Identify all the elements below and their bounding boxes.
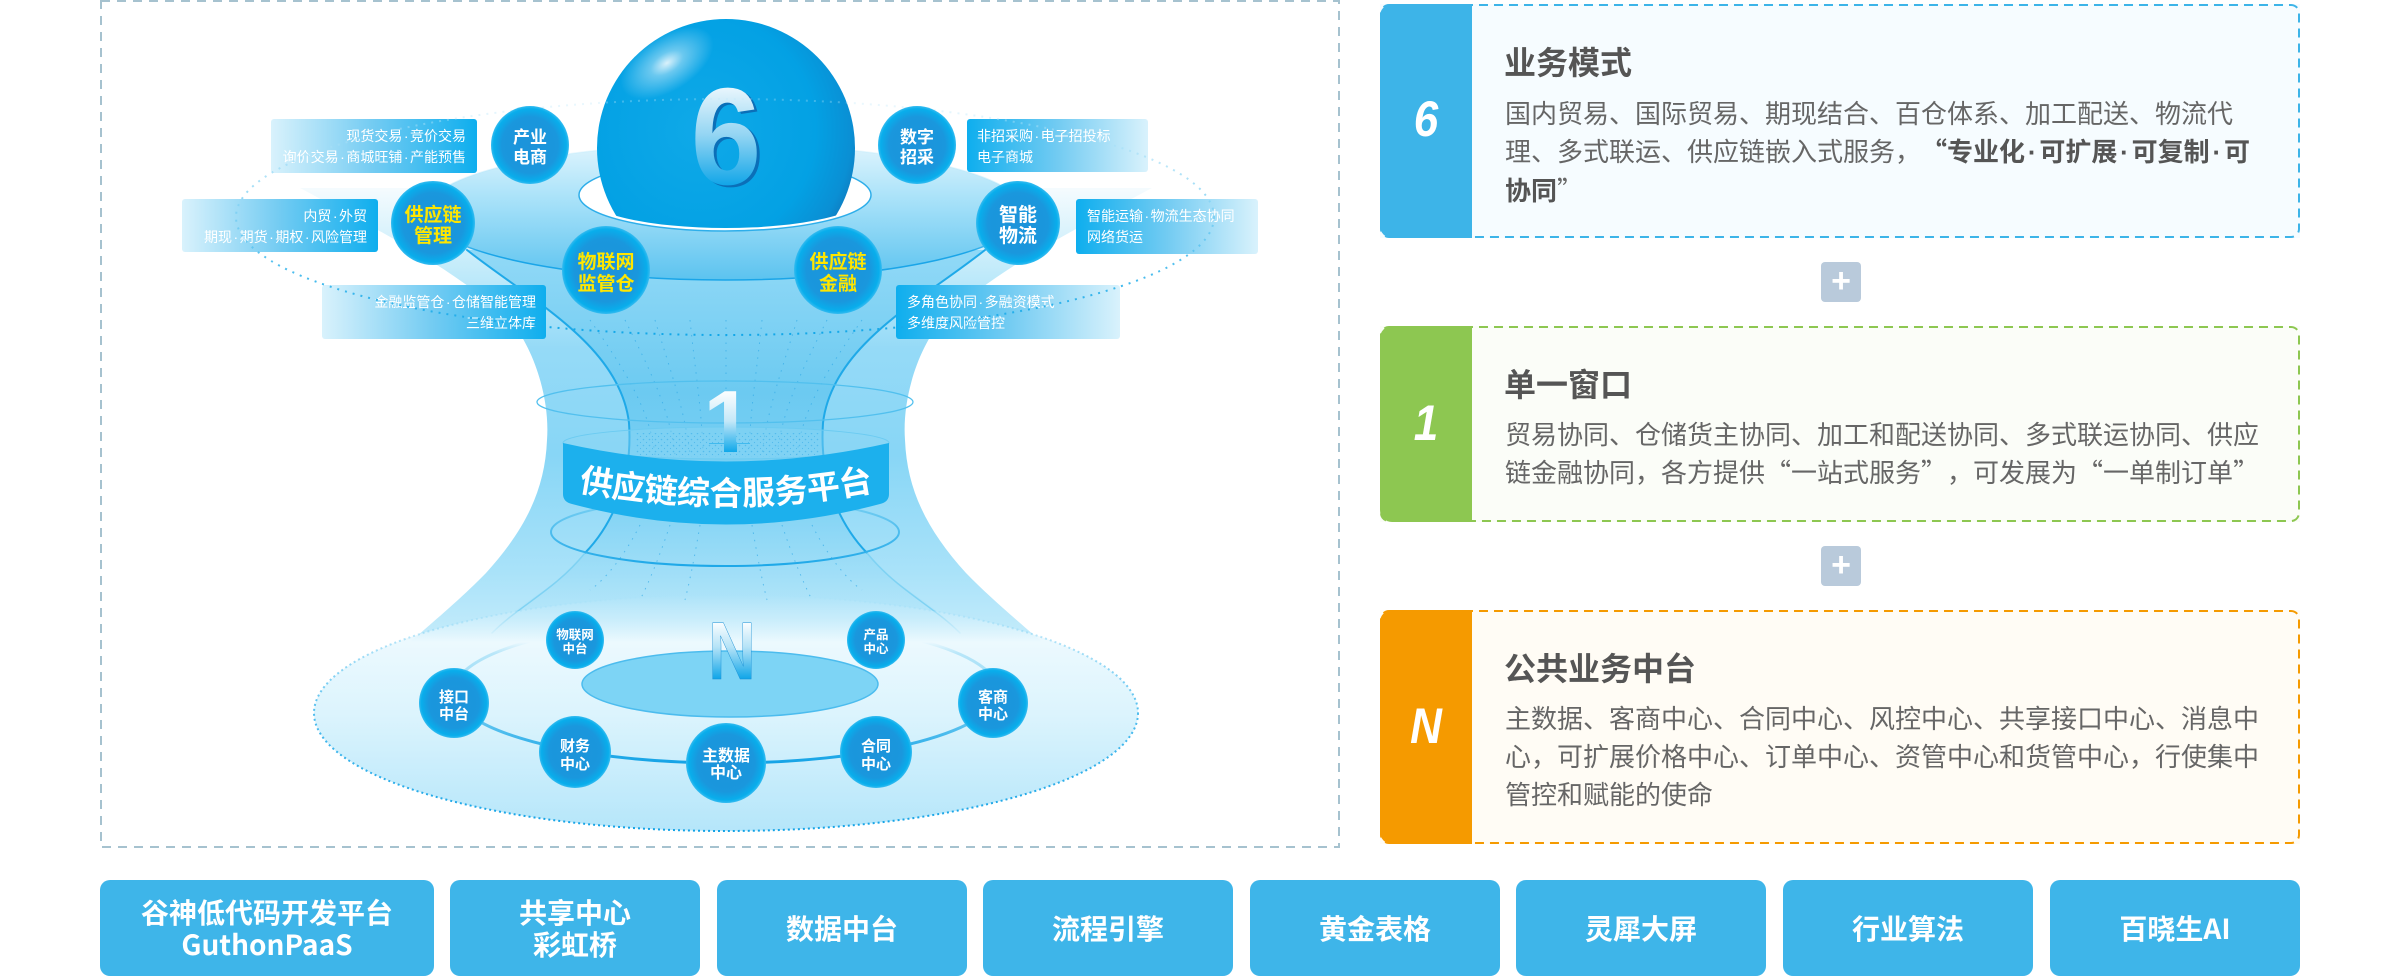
body: · [2120,137,2129,167]
center: 主数据中心 [686,723,766,803]
numeral 6: 6 [691,60,761,214]
body: · [2028,137,2037,167]
center: 物联网中台 [546,611,604,669]
sphere [597,19,855,228]
center: 接口中台: 接口 [439,686,469,707]
label: 产业电商 detail: 询价交易·商城旺铺·产能预售 [283,149,466,165]
card: 单一窗口 [1380,326,2300,522]
number 1: 1 [1414,395,1438,451]
label: 供应链管理 detail: 期现·期货·期权·风险管理 [204,229,367,245]
panel border [101,1,1339,847]
center: 物联网中台: 中台 [562,638,588,657]
body: 理、多式联运、供应链嵌入式服务， 专业化 可扩展 可复制 可 [1505,132,2250,169]
numeral 1: 1 [704,372,752,471]
numeral 6 shadow: 6 [694,62,764,216]
center: 客商中心: 客商 [978,686,1008,707]
body: “ [1765,453,1791,490]
plus: + [1831,546,1851,584]
button: 灵犀大屏: 灵犀大屏 [1585,908,1697,948]
button: 黄金表格 [1250,880,1500,976]
button: 黄金表格: 黄金表格 [1319,908,1431,948]
badge 6 [1380,4,1472,238]
ring connecting centers [454,619,998,763]
body: “ [1921,132,1947,169]
label: 智能物流 detail [1076,199,1258,254]
body [1505,699,2259,812]
plus [1821,546,1861,586]
body: 管控和赋能的使命 [1505,775,1713,812]
body: 协同 [1505,171,1557,208]
plus [1821,262,1861,302]
circle: 智能物流: 智能 [999,200,1037,227]
number N: N [1410,698,1442,754]
number 6: 6 [1414,91,1438,147]
circle: 物联网监管仓: 监管仓 [577,269,635,296]
center: 物联网中台: 物联网 [556,624,594,643]
circle: 供应链管理 [391,181,475,265]
center: 财务中心: 中心 [560,753,590,774]
button: 谷神低代码开发平台: GuthonPaaS [181,924,353,964]
top disc [425,144,1025,280]
label: 数字招采 detail: 电子商城 [977,149,1033,165]
button: 共享中心彩虹桥: 彩虹桥 [533,924,617,964]
heading: 单一窗口 [1504,360,1632,406]
center: 客商中心: 中心 [978,703,1008,724]
circle: 数字招采 [878,106,956,184]
circle: 产业电商: 电商 [513,143,547,168]
badge N [1380,610,1472,844]
central ellipse [582,651,878,717]
circle: 数字招采: 数字 [900,123,934,148]
waist upper ring [537,381,913,423]
center: 客商中心 [958,668,1028,738]
button: 谷神低代码开发平台: 谷神低代码开发平台 [141,892,393,932]
label: 物联网监管仓 detail: 金融监管仓·仓储智能管理 [374,294,536,310]
funnel inner tube [467,250,985,633]
circle: 数字招采: 招采 [900,143,934,168]
circle: 供应链金融: 供应链 [809,247,867,274]
body: ” [2233,453,2259,490]
body: 国内贸易、国际贸易、期现结合、百仓体系、加工配送、物流代 [1505,94,2233,131]
button: 行业算法: 行业算法 [1852,908,1964,948]
platform band [562,428,890,524]
circle: 产业电商: 产业 [513,123,547,148]
button: 百晓生AI: 百晓生AI [2119,908,2231,948]
card: 业务模式 [1380,4,2300,238]
platform title: 供应链综合服务平台 [582,464,869,508]
button: 谷神低代码开发平台 [100,880,434,976]
body: ” [1921,453,1947,490]
button: 灵犀大屏 [1516,880,1766,976]
body: ” [1557,171,1583,208]
center: 主数据中心: 中心 [710,759,742,783]
label: 产业电商 detail [271,119,477,173]
tube curves [467,250,985,633]
label boxes [182,119,1258,339]
body [1505,94,2250,208]
base centers [419,611,1028,803]
panel: funnel diagram [100,0,1340,848]
label: 物联网监管仓 detail: 三维立体库 [466,315,536,331]
label: 智能物流 detail: 智能运输·物流生态协同 [1087,208,1235,224]
base platform [314,595,1138,831]
body: 心，可扩展价格中心、订单中心、资管中心和货管中心，行使集中 [1505,737,2259,774]
body [1505,415,2259,490]
center: 产品中心: 产品 [863,624,889,643]
top module circles [391,106,1060,314]
center: 主数据中心: 主数据 [702,742,750,766]
button: 共享中心彩虹桥: 共享中心 [519,892,631,932]
button: 百晓生AI [2050,880,2300,976]
circle: 产业电商 [491,106,569,184]
heading: 公共业务中台 [1504,644,1696,690]
center: 产品中心: 中心 [863,638,889,657]
circle: 供应链管理: 供应链 [404,200,462,227]
center: 合同中心: 中心 [861,753,891,774]
circle: 智能物流: 物流 [999,221,1037,248]
label: 数字招采 detail [967,119,1148,172]
center: 财务中心: 财务 [560,735,590,756]
button: 行业算法 [1783,880,2033,976]
center: 产品中心 [847,611,905,669]
button: 流程引擎 [983,880,1233,976]
plus: + [1831,262,1851,300]
heading: 业务模式 [1504,38,1632,84]
circle: 物联网监管仓: 物联网 [577,247,635,274]
body: “ [2077,453,2103,490]
circle: 智能物流 [976,181,1060,265]
center: 接口中台 [419,668,489,738]
numeral N: N [708,605,756,697]
body: 贸易协同、仓储货主协同、加工和配送协同、多式联运协同、供应 [1505,415,2259,452]
circle: 物联网监管仓 [562,226,650,314]
radial dotted lines [590,320,862,600]
button: 数据中台 [717,880,967,976]
button: 数据中台: 数据中台 [786,908,898,948]
circle: 供应链管理: 管理 [414,221,452,248]
label: 产业电商 detail: 现货交易·竞价交易 [346,128,466,144]
center: 合同中心: 合同 [861,735,891,756]
label: 供应链金融 detail: 多角色协同·多融资模式 [907,294,1055,310]
body: · [2212,137,2221,167]
badge 1 [1380,326,1472,522]
outer dotted orbit [236,99,1214,335]
label: 供应链金融 detail: 多维度风险管控 [907,315,1005,331]
funnel body [300,188,1152,720]
button: 共享中心彩虹桥 [450,880,700,976]
card: 公共业务中台 [1380,610,2300,844]
circle: 供应链金融: 金融 [819,269,857,296]
center: 财务中心 [539,716,611,788]
center: 接口中台: 中台 [439,703,469,724]
waist lower ring [551,498,899,566]
label: 供应链管理 detail: 内贸·外贸 [303,208,367,224]
label: 物联网监管仓 detail [322,285,546,339]
button: 流程引擎: 流程引擎 [1052,908,1164,948]
circle: 供应链金融 [794,226,882,314]
center: 合同中心 [840,716,912,788]
label: 数字招采 detail: 非招采购·电子招投标 [977,128,1111,144]
label: 供应链管理 detail [182,199,378,252]
body: 链金融协同，各方提供 一站式服务 ，可发展为 一单制订单 [1505,453,2233,490]
body: 主数据、客商中心、合同中心、风控中心、共享接口中心、消息中 [1505,699,2259,736]
disc white opening [579,159,871,231]
label: 供应链金融 detail [896,285,1120,339]
label: 智能物流 detail: 网络货运 [1087,229,1143,245]
